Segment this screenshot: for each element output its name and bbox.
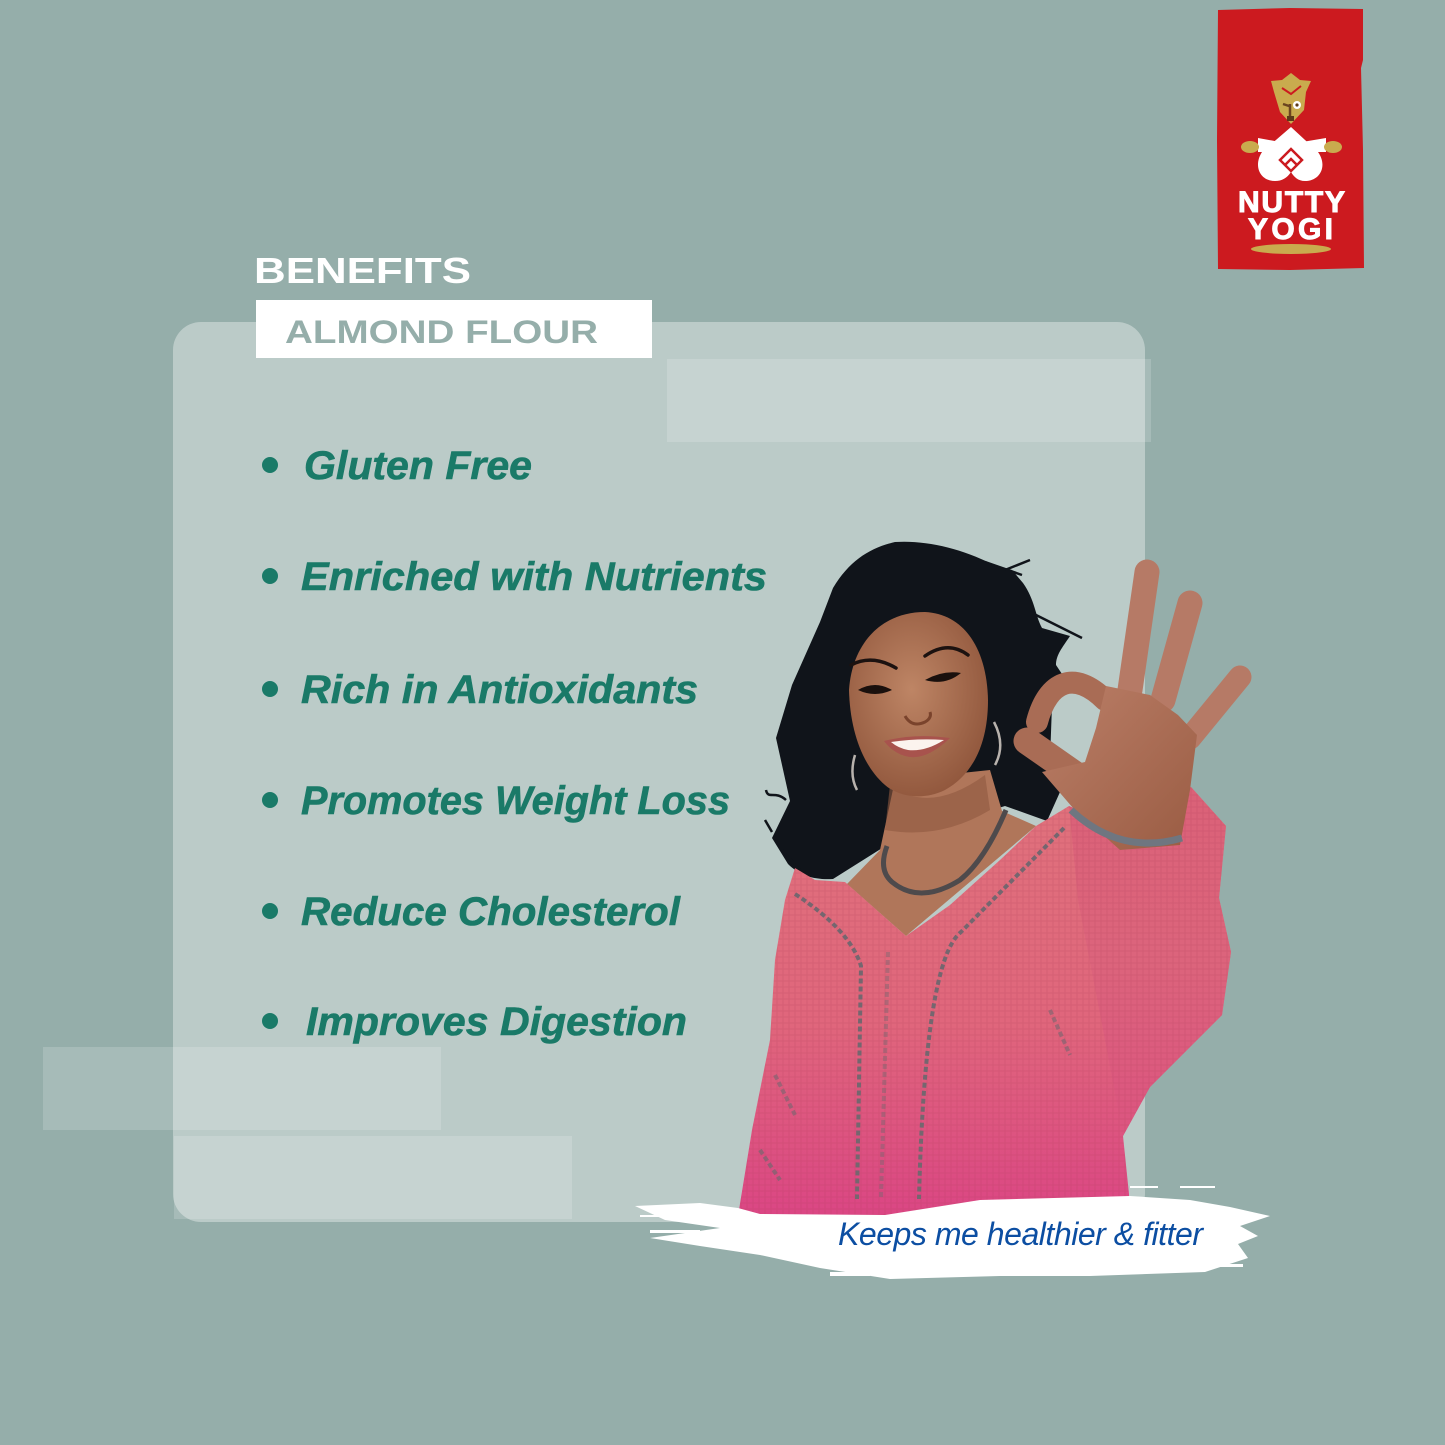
panel: benefits card xyxy=(173,322,1145,1222)
nose xyxy=(905,712,930,724)
fingers xyxy=(1027,572,1240,785)
decorative band: lower left xyxy=(43,1047,441,1130)
label: almond flour: ALMOND FLOUR xyxy=(285,314,598,350)
brush stroke xyxy=(635,1186,1270,1279)
necklace xyxy=(883,810,1006,893)
hand xyxy=(1027,572,1240,850)
benefit: improves digestion: Improves Digestion xyxy=(306,1000,687,1044)
palm xyxy=(1042,686,1197,850)
eyes xyxy=(858,672,961,694)
decorative band: top right xyxy=(667,359,1151,442)
brows xyxy=(851,648,968,668)
sweater xyxy=(738,787,1231,1216)
brush stroke caption xyxy=(635,1186,1270,1279)
hair xyxy=(765,542,1082,879)
brand name xyxy=(1238,186,1345,246)
neck shadow xyxy=(885,775,990,832)
caption: Keeps me healthier & fitter xyxy=(838,1216,1204,1252)
icon: hands xyxy=(1241,141,1342,153)
logo: nutty yogi xyxy=(1217,8,1364,270)
benefit: gluten free: Gluten Free xyxy=(304,444,532,488)
decorative band: bottom xyxy=(174,1136,572,1219)
smile xyxy=(884,736,950,757)
brand name: NUTTY xyxy=(1238,186,1345,219)
benefits list xyxy=(262,444,767,1044)
wrist band xyxy=(1071,810,1182,843)
benefit: enriched with nutrients: Enriched with Nutrients xyxy=(301,555,767,599)
face xyxy=(849,612,988,796)
brand name: YOGI xyxy=(1248,213,1333,246)
sleeve xyxy=(1069,787,1231,1136)
benefit: reduce cholesterol: Reduce Cholesterol xyxy=(301,890,681,934)
benefit: promotes weight loss: Promotes Weight Loss xyxy=(301,779,730,823)
heading: benefits: BENEFITS xyxy=(254,250,471,291)
icon: white knot body xyxy=(1258,127,1326,181)
benefit: rich in antioxidants: Rich in Antioxidants xyxy=(301,668,698,712)
logo background xyxy=(1217,8,1364,270)
lace stitch lines xyxy=(760,828,1070,1199)
neck and chest xyxy=(847,770,1036,936)
label: almond flour xyxy=(256,300,652,358)
illustration: woman making ok gesture xyxy=(738,542,1240,1216)
earrings xyxy=(852,722,1000,790)
gold base xyxy=(1251,244,1331,254)
icon: yogi head xyxy=(1271,73,1311,124)
